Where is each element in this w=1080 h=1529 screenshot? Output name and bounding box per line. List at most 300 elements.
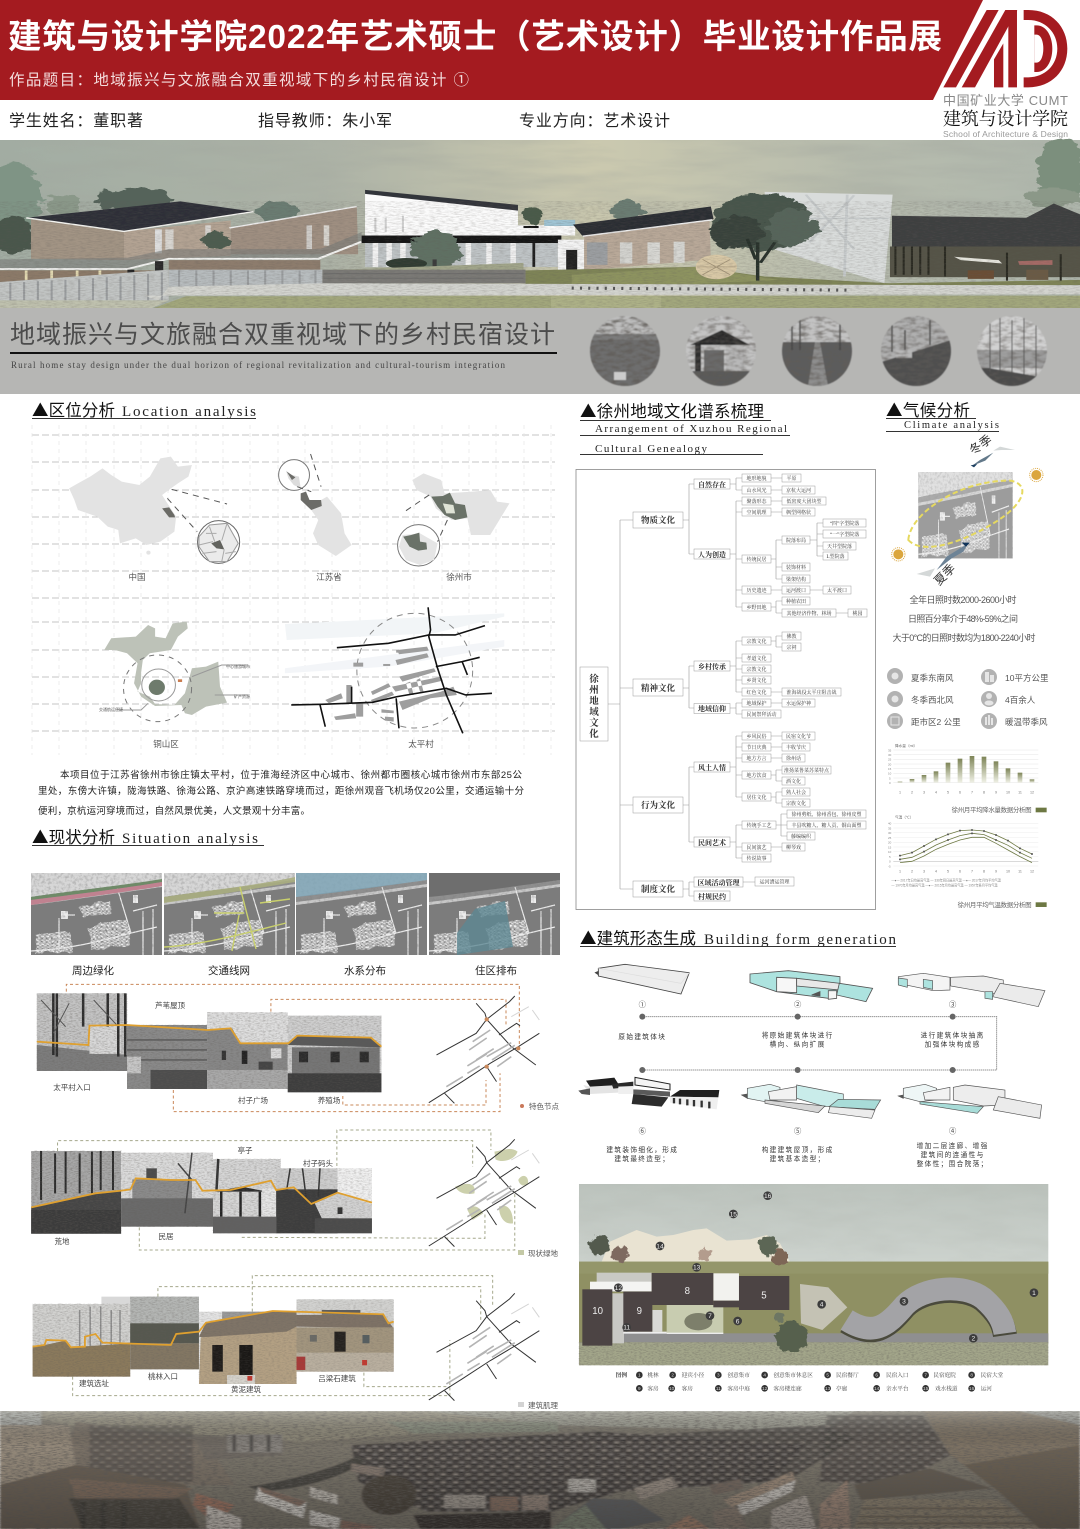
rainfall caption: 徐州月平均降水量数据分析图	[952, 805, 1032, 814]
master site plan: 5	[761, 1291, 767, 1302]
level 2 nodes: 地域信仰	[698, 704, 726, 713]
map: Tongshan district	[104, 622, 248, 722]
photo strip 3 labels: 建筑选址	[79, 1378, 109, 1388]
item: distance: 距市区2 公里	[911, 717, 961, 727]
location description paragraph: 本项目位于江苏省徐州市徐庄镇太平村，位于淮海经济区中心城市、徐州都市圈核心城市徐州市东部25公	[60, 769, 522, 781]
level 3 and deeper nodes: 乡风民俗	[746, 733, 767, 740]
site plan legend: 民宿入口	[886, 1371, 909, 1379]
level 3 and deeper nodes: 淮海战役太平庄阻击战	[786, 689, 837, 696]
climate sun path diagram	[892, 447, 1043, 577]
level 3 and deeper nodes: 运河漕运管理	[759, 878, 790, 886]
photo strip 3 labels	[79, 1371, 356, 1394]
rainfall bar chart: 1	[899, 791, 901, 795]
step numbers: ⑥	[639, 1126, 647, 1135]
temperature line chart: 25	[888, 836, 892, 840]
photo strip 2 labels: 村子码头	[303, 1158, 333, 1168]
level 1 nodes: 精神文化	[641, 683, 675, 693]
photo strip 1 labels: 养殖场	[318, 1095, 341, 1105]
site plan legend: 16	[969, 1386, 975, 1391]
rainfall bar chart: 2	[911, 791, 913, 795]
white central volume	[365, 191, 575, 236]
rainfall bar chart: 8	[983, 791, 985, 795]
level 3 and deeper nodes: “一”字型院落	[830, 531, 859, 538]
heading: regional culture genealogy: ▲徐州地域文化谱系梳理	[580, 398, 764, 422]
temperature line chart: 7	[971, 869, 973, 873]
aerial: housing	[429, 873, 560, 955]
level 3 and deeper nodes: 京杭大运河	[786, 487, 811, 494]
sunshine statistics: 日照百分率介于48%-59%之间	[908, 613, 1018, 624]
photo strip 2 labels: 荒地	[54, 1236, 70, 1246]
temperature legend: —●— 2017年日均最高气温 — 330年同日最高气温 —●— 2017年月均平均气温	[891, 877, 1002, 882]
photo strip 1 labels	[53, 1000, 341, 1105]
step captions: 增加二层连廊、增强	[917, 1141, 989, 1150]
site plan legend: 15	[923, 1386, 929, 1391]
master site plan	[579, 1184, 1048, 1392]
root node	[580, 667, 608, 741]
map labels	[99, 572, 472, 749]
photo strip 3 labels: 吕梁石建筑	[318, 1373, 356, 1383]
aerial map captions: 交通线网	[208, 964, 250, 977]
level 3 and deeper nodes: 院落布局	[786, 537, 806, 544]
level 3 and deeper nodes: 装饰材料	[786, 564, 806, 571]
skyline trace	[31, 1178, 372, 1207]
site plan legend: 2	[671, 1373, 674, 1378]
site plan legend: 客房	[682, 1384, 693, 1392]
icon: sun winter	[1030, 468, 1043, 482]
mass step 3	[898, 973, 1045, 1007]
master site plan: 4	[820, 1302, 824, 1309]
heading: location analysis	[32, 397, 256, 421]
site plan legend: 4	[763, 1373, 766, 1378]
level 3 and deeper nodes: 佛教	[786, 633, 797, 640]
heading: building form generation: ▲建筑形态生成	[580, 925, 696, 949]
site plan legend: 客房楼连廊	[773, 1384, 802, 1392]
site plan legend	[616, 1371, 1004, 1392]
heading: regional culture genealogy: Arrangement of Xuzhou Regional	[595, 423, 787, 435]
aerial map captions: 水系分布	[344, 965, 386, 977]
level 3 and deeper nodes: 历史遗迹	[746, 587, 767, 594]
item: population: 4百余人	[1005, 695, 1036, 705]
light roofs	[597, 1273, 652, 1292]
sunshine statistics: 大于0°C的日照时数均为1800-2240小时	[892, 632, 1036, 643]
level 3 and deeper nodes: 宗祠	[786, 644, 797, 651]
right brick wing	[558, 240, 584, 270]
temperature caption: 徐州月平均气温数据分析图	[958, 900, 1032, 909]
legend: existing green space	[518, 1248, 558, 1258]
level 2 nodes: 人为创造	[698, 550, 726, 559]
temperature line chart: 5	[947, 869, 949, 873]
master site plan: 10	[592, 1306, 603, 1317]
photo: village square	[207, 1012, 288, 1089]
level 3 and deeper nodes: 淮扬菜鲁菜苏菜特点	[784, 767, 830, 774]
rainfall bar chart: 35	[888, 748, 892, 752]
temperature line chart: 15	[888, 845, 892, 849]
student info row	[9, 112, 670, 130]
photo strip 1 labels: 芦苇屋顶	[155, 1000, 185, 1010]
master site plan: 8	[685, 1286, 690, 1297]
logo: school name	[943, 93, 1068, 139]
level 3 and deeper nodes: 徐州剪纸、徐州香包、徐州皮塑	[791, 811, 862, 818]
level 1 nodes: 物质文化	[641, 515, 675, 525]
temperature line chart: 30	[888, 831, 892, 835]
legend: existing green space: 现状绿地	[528, 1248, 558, 1258]
temperature line chart: 8	[983, 869, 985, 873]
number markers	[614, 1191, 1038, 1343]
level 3 and deeper nodes: 传统手工艺	[746, 822, 772, 829]
student info row: 学生姓名：董职著	[9, 112, 143, 130]
level 2 nodes: 风土人情	[698, 763, 726, 772]
temperature line chart: 2	[911, 869, 913, 873]
photo: building site	[33, 1297, 199, 1377]
level 1 nodes: 行为文化	[641, 800, 675, 810]
photo: village entrance	[37, 993, 127, 1071]
skyline trace	[37, 1025, 381, 1047]
icon: summer wind arrow	[917, 543, 970, 577]
level 2 nodes: 村规民约	[698, 892, 726, 901]
logo: school name: 建筑与设计学院	[943, 109, 1068, 129]
temperature legend: — 1970年月均最高气温 —●— 2015年月均最高气温 — 1957年各月平均气温	[891, 883, 998, 888]
level 2 nodes	[694, 479, 743, 901]
level 3 and deeper nodes: 桃园	[852, 610, 863, 617]
location description paragraph	[38, 769, 524, 817]
level 3 and deeper nodes: 其他经济作物、林场	[786, 610, 832, 617]
photo strip 2 labels: 民居	[158, 1232, 174, 1241]
level 3 and deeper nodes: 乡野田地	[746, 604, 767, 611]
level 3 and deeper nodes: 宗教文化	[746, 638, 767, 645]
temperature line chart: 气温（℃）	[895, 815, 913, 820]
item: winter wind	[887, 691, 954, 707]
level 3 and deeper nodes: 山水风光	[746, 487, 767, 494]
item: summer wind: 夏季东南风	[911, 673, 954, 683]
level 3 and deeper nodes: 太平渡口	[827, 587, 847, 594]
master site plan: 11	[623, 1325, 630, 1332]
culture genealogy tree	[576, 470, 876, 910]
boundary wall and fence	[322, 270, 526, 283]
photo: reed roof	[127, 1025, 207, 1089]
step captions: 建筑最终造型；	[614, 1154, 670, 1163]
level 3 and deeper nodes: 地形地貌	[746, 475, 767, 482]
heading: climate analysis	[886, 397, 999, 432]
level 3 and deeper nodes: 地域保护	[746, 700, 767, 707]
rainfall bar chart: 4	[935, 791, 937, 795]
level 1 nodes	[633, 512, 683, 897]
site plan legend: 14	[874, 1386, 880, 1391]
site plan legend: 7	[924, 1373, 927, 1378]
temperature line chart: -5	[888, 864, 891, 868]
temperature line chart: 3	[923, 869, 925, 873]
grass lawn	[526, 267, 1080, 286]
center dense village	[351, 1432, 806, 1512]
temperature line chart: 0	[889, 860, 891, 864]
rainfall bar chart: 3	[923, 791, 925, 795]
temperature line chart: 40	[888, 822, 892, 826]
dashed location grid	[32, 425, 555, 755]
site plan legend: 5	[826, 1373, 829, 1378]
season labels: 夏季	[931, 561, 958, 588]
step numbers: ③	[949, 1000, 957, 1009]
mini road map	[429, 996, 539, 1103]
sun path	[908, 481, 1022, 547]
rainfall bar chart: 12	[1030, 791, 1034, 795]
step captions: 构建建筑屋顶，形成	[762, 1145, 834, 1154]
level 3 and deeper nodes: 居住文化	[746, 794, 767, 801]
level 2 nodes: 自然存在	[698, 480, 726, 489]
photo strip 1: feature nodes	[37, 984, 539, 1112]
map: Xuzhou city	[398, 473, 510, 566]
dotted process line	[642, 1017, 997, 1070]
site plan legend: 亲水平台	[886, 1384, 909, 1392]
rainfall bar chart: 9	[995, 791, 997, 795]
site plan legend: 桃林	[647, 1371, 659, 1379]
road	[623, 1333, 1048, 1342]
sunshine statistics: 全年日照时数2000-2600小时	[910, 594, 1016, 605]
heading: situation analysis: ▲现状分析	[32, 824, 115, 848]
step captions: 整体性；围合院落；	[917, 1159, 989, 1168]
master site plan: 12	[615, 1285, 622, 1292]
root node: 地	[589, 695, 599, 707]
level 3 and deeper nodes: 宗族文化	[786, 800, 806, 807]
level 3 and deeper nodes: 藤编编织	[791, 833, 812, 840]
step numbers: ⑤	[794, 1126, 802, 1135]
trees behind	[0, 138, 1080, 254]
step numbers	[639, 1000, 957, 1135]
logo: school mark	[943, 10, 1067, 87]
right field	[854, 1498, 1040, 1529]
site plan legend: 10	[669, 1386, 675, 1391]
site plan legend: 戏水栈道	[935, 1384, 958, 1392]
rainfall caption	[952, 805, 1047, 814]
map: China	[69, 457, 240, 563]
location maps	[69, 454, 510, 733]
step captions: 将原始建筑体块进行	[762, 1030, 834, 1039]
dashed connectors	[66, 984, 519, 1112]
aerial map captions	[72, 964, 517, 977]
level 3 and deeper nodes: 天井型院落	[827, 543, 852, 550]
root node: 州	[589, 684, 599, 696]
mass step 5	[742, 1084, 881, 1118]
mass step 4	[898, 1084, 1042, 1118]
location description paragraph: 里处，东傍大许镇，陇海铁路、徐海公路、京沪高速铁路穿境而过，距徐州观音飞机场仅20公里，交通运输十分	[38, 785, 524, 797]
aerial: greenery	[31, 873, 162, 955]
bottom aerial village panorama	[0, 1411, 1080, 1529]
photo strip 3 labels: 桃林入口	[148, 1371, 178, 1381]
map labels: 铜山区	[153, 739, 179, 749]
aerial: water	[296, 873, 427, 955]
item: climate type	[981, 713, 1048, 729]
project subtitle: 作品题目：地域振兴与文旅融合双重视域下的乡村民宿设计 ①	[9, 71, 469, 89]
heading: situation analysis: Situation analysis	[122, 831, 258, 847]
level 3 and deeper nodes: 酒文化	[786, 778, 801, 785]
heading: climate analysis: Climate analysis	[904, 420, 999, 431]
rainfall bar chart: 20	[888, 762, 892, 766]
gable screen wall	[765, 192, 893, 283]
left brick block	[31, 219, 124, 260]
level 3 and deeper nodes: 孝道文化	[746, 655, 767, 662]
mass step 1	[595, 964, 689, 994]
photo strip 2 labels: 亭子	[238, 1145, 253, 1155]
photo strip 1 labels: 太平村入口	[53, 1082, 91, 1092]
root node: 化	[589, 728, 599, 740]
master site plan: 13	[693, 1265, 701, 1272]
level 3 and deeper nodes: 柳琴戏	[786, 844, 801, 851]
site plan legend: 8	[970, 1373, 973, 1378]
item: area: 10平方公里	[1005, 673, 1049, 683]
level 3 and deeper nodes: 水运保护神	[786, 700, 811, 707]
item: area	[981, 669, 1049, 685]
map labels: 中心旅游城市	[226, 663, 250, 669]
map: Jiangsu province	[279, 454, 352, 556]
level 3 and deeper nodes: 枫型网格状	[786, 509, 811, 516]
rainfall bar chart: 10	[888, 772, 892, 776]
master site plan: 14	[656, 1243, 664, 1250]
heading: regional culture genealogy: Cultural Genealogy	[595, 443, 708, 455]
dashed connectors	[58, 1130, 515, 1250]
photo: residence	[121, 1153, 213, 1227]
heading: regional culture genealogy	[580, 398, 790, 455]
map labels: 徐州市	[446, 572, 472, 582]
site plan legend: 亭廊	[836, 1384, 848, 1392]
site plan legend: 1	[638, 1373, 641, 1378]
canal	[248, 1455, 365, 1492]
courtyard	[667, 1305, 723, 1333]
water surface	[579, 1184, 1048, 1262]
level 3 and deeper nodes: 地方方言	[746, 755, 767, 762]
rainfall bar chart: 7	[971, 791, 973, 795]
temperature line chart: 5	[889, 855, 891, 859]
chinese project title: 地域振兴与文旅融合双重视域下的乡村民宿设计	[10, 321, 555, 349]
level 3 and deeper nodes: 聚落形态	[746, 498, 767, 505]
master site plan: 3	[902, 1299, 906, 1306]
temperature line chart: 4	[935, 869, 937, 873]
temperature line chart: 20	[888, 841, 892, 845]
rainfall bar chart: 降水量（ml）	[895, 743, 917, 748]
level 3 and deeper nodes: 丰县吹糖人、糖人贡、铜山面塑	[791, 822, 862, 829]
temperature line chart: 10	[1006, 869, 1010, 873]
photo: wasteland	[31, 1151, 121, 1234]
level 2 nodes: 乡村传承	[698, 662, 726, 671]
master site plan: 2	[971, 1336, 975, 1343]
heading: location analysis: ▲区位分析	[32, 397, 115, 421]
level 3 and deeper nodes: 传统民居	[746, 556, 767, 563]
rest area	[800, 1284, 847, 1330]
temperature line chart	[888, 815, 1047, 909]
mini road map with greens	[429, 1139, 539, 1247]
heading: building form generation: Building form generation	[704, 932, 896, 948]
photo strip 3 labels: 黄泥建筑	[231, 1384, 261, 1394]
map labels: 交通航运便捷	[99, 706, 123, 712]
level 3 and deeper nodes: 地方饮食	[746, 772, 767, 779]
icon: sun summer	[892, 548, 905, 561]
photo strip 2 labels	[54, 1145, 333, 1246]
rainfall bar chart: 5	[889, 776, 891, 780]
item: distance	[887, 713, 961, 729]
rainfall bar chart: 6	[959, 791, 961, 795]
site plan legend: 创意集市	[727, 1371, 750, 1379]
level 3 and deeper nodes: “四”字型院落	[830, 520, 859, 527]
rainfall bar chart: 30	[888, 753, 892, 757]
rainfall bar chart: 0	[889, 781, 891, 785]
building form generation diagram	[578, 964, 1045, 1168]
header banner	[0, 0, 983, 100]
map labels: 太平村	[408, 739, 434, 749]
site plan legend: 13	[825, 1386, 831, 1391]
far fields	[42, 1411, 506, 1442]
legend: feature node	[520, 1101, 559, 1111]
item: climate type: 暖温带季风	[1005, 717, 1048, 727]
foreground grass	[145, 296, 1080, 311]
step numbers: ①	[639, 1000, 647, 1009]
master site plan: 16	[764, 1193, 772, 1200]
map: Taiping village roads	[285, 607, 506, 733]
temperature line chart: 35	[888, 826, 892, 830]
level 3 and deeper nodes: 宗教文化	[746, 666, 767, 673]
road and stepping stones	[145, 283, 1080, 300]
photo: mud brick building	[199, 1311, 297, 1384]
step captions: 进行建筑体块抽离	[921, 1030, 985, 1039]
season labels: 冬季	[966, 431, 994, 457]
level 3 and deeper nodes: L型院落	[826, 553, 845, 560]
heading: location analysis: Location analysis	[122, 404, 256, 420]
heading: climate analysis: ▲气候分析	[886, 397, 970, 421]
site plan legend: 运河	[981, 1384, 992, 1392]
waterfront platform	[602, 1228, 790, 1262]
mass step 6 final	[578, 1077, 719, 1109]
level 3 and deeper nodes: 熟人社会	[786, 789, 806, 796]
photo: peach grove entrance	[130, 1297, 199, 1369]
site plan legend: 12	[762, 1386, 768, 1391]
site aerial	[918, 472, 1013, 558]
photo strip 1 labels: 村子广场	[238, 1095, 268, 1105]
site plan legend: 民宿庭院	[933, 1371, 956, 1379]
master site plan: 9	[637, 1306, 642, 1317]
master site plan: 6	[736, 1318, 740, 1325]
site plan legend: 民宿大堂	[981, 1371, 1004, 1379]
red banner shape	[0, 0, 983, 100]
photo: Lvliang stone building	[297, 1299, 394, 1372]
location description paragraph: 便利，京杭运河穿境而过，自然风景优美，人文景观十分丰富。	[38, 805, 310, 817]
terrace	[0, 232, 362, 269]
map labels: 矿产资源	[234, 693, 250, 699]
large tree	[711, 193, 816, 251]
lawn	[579, 1262, 1048, 1343]
site plan legend: 客房	[647, 1384, 659, 1392]
rainfall bar chart: 5	[947, 791, 949, 795]
level 3 and deeper nodes: 传说故事	[746, 855, 767, 862]
site plan legend: 客房中庭	[727, 1384, 750, 1392]
temperature legend	[891, 877, 1002, 888]
temperature line chart: 9	[995, 869, 997, 873]
season labels	[931, 431, 994, 588]
photo: breeding farm	[288, 1016, 381, 1092]
level 3 and deeper nodes: 民宿文化节	[786, 733, 811, 740]
site plan legend: 创意集市休息区	[773, 1371, 813, 1379]
level 3 and deeper nodes: 乡贤文化	[746, 677, 767, 684]
level 3 and deeper nodes: 种植农田	[786, 598, 806, 605]
level 3 and deeper nodes: 梁架结构	[786, 576, 806, 583]
rainfall bar chart: 15	[888, 767, 892, 771]
aerial analysis maps	[31, 873, 560, 955]
root node: 文	[589, 717, 599, 729]
level 3 and deeper nodes: 节日庆典	[746, 744, 767, 751]
level 2 nodes: 民间艺术	[698, 838, 726, 847]
site plan legend: 6	[875, 1373, 878, 1378]
site plan legend: 9	[638, 1386, 641, 1391]
level 3 and deeper nodes: 丰收节庆	[786, 744, 806, 751]
student info row: 指导教师：朱小军	[258, 112, 392, 130]
site plan legend: 迎宾小径	[682, 1371, 705, 1379]
rainfall bar chart: 10	[1006, 791, 1010, 795]
step numbers: ②	[794, 1000, 802, 1009]
